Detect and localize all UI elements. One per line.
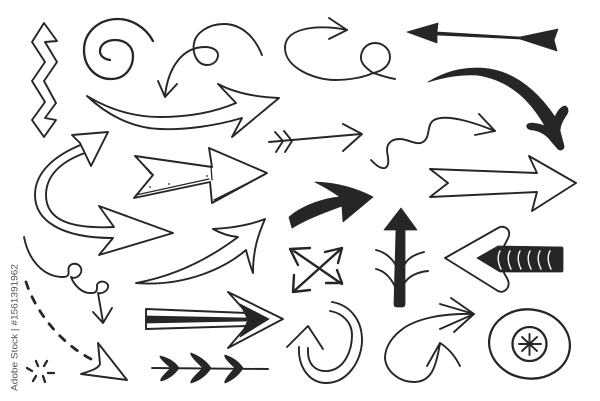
icon: thick curved arrow	[428, 68, 568, 150]
icon: squiggly arrow	[371, 114, 495, 168]
icon: notched outline arrow with shadow	[134, 148, 267, 203]
icon: long swoosh arrow	[87, 84, 279, 137]
icon: solid curved arrow	[289, 182, 373, 228]
icon: curly arrow with two loops	[24, 237, 112, 323]
icon: feather chevron arrow	[152, 353, 268, 383]
icon: thin arrow with loop	[285, 18, 395, 80]
icon: four-way crossed arrows	[290, 248, 342, 292]
icon: striped double arrow	[146, 292, 283, 348]
icon: thin feathered arrow	[269, 124, 362, 152]
icon: solid up arrow with branches	[376, 208, 428, 307]
caption: stock credit: Adobe Stock | #1561391962	[10, 264, 20, 391]
icon: looping arrow pointing down	[158, 24, 262, 97]
icon: eye-shaped circle with asterisk	[485, 304, 574, 384]
icon: U-turn arrow	[287, 302, 362, 383]
icon: outline-and-solid left arrow	[445, 227, 563, 292]
icon: zigzag arrow	[32, 23, 57, 137]
icon: big loop arrow with two heads	[385, 298, 474, 382]
icon: spiral	[84, 19, 153, 79]
icon: dashed arrow	[26, 282, 127, 380]
icon: solid double-head arrow pointing left	[407, 23, 558, 51]
icon: notched outline arrow	[430, 156, 576, 211]
icon: small burst of dashes	[27, 361, 54, 382]
icon: swoosh arrow pointing up-right	[136, 219, 265, 284]
icon: curved outline arrow with triangle head	[35, 132, 173, 255]
